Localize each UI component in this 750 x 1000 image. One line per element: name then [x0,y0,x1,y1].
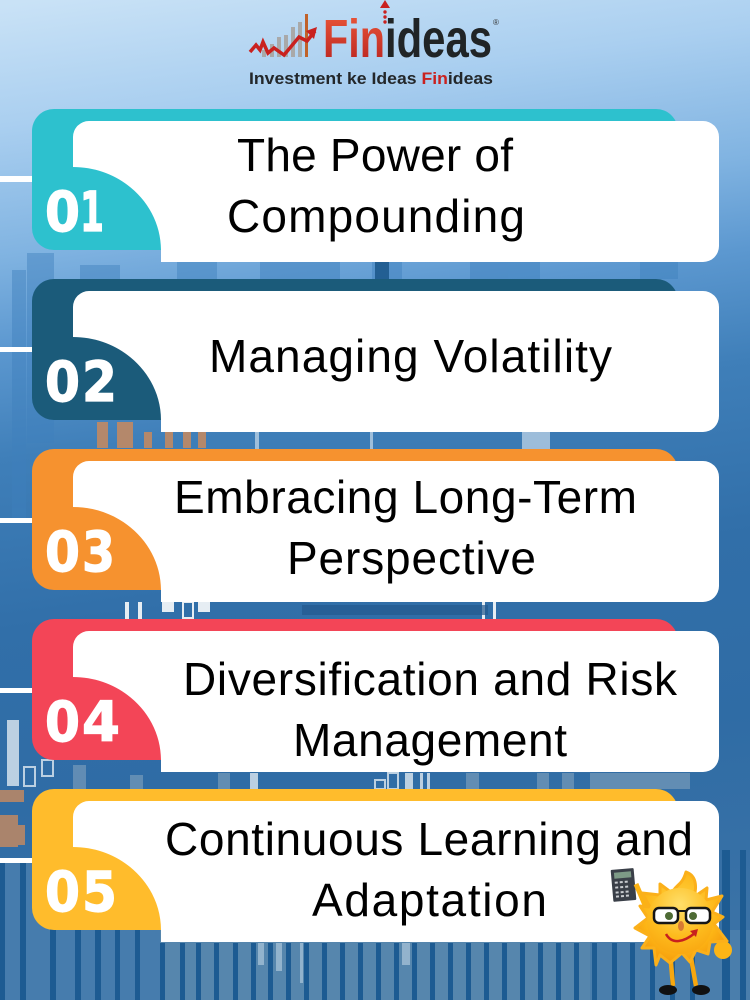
logo icon: rising chart with arrow [250,14,317,57]
number tab 03 [32,449,678,590]
heading 01: Compounding [227,190,525,242]
smile arrow [666,929,698,941]
number 01: 0 [45,180,80,244]
white card 01 [73,121,719,262]
panel: 02 Managing Volatility [32,279,719,432]
heading 01: The Power of [237,129,513,181]
logo wordmark: ideas [385,9,492,69]
number 03: 0 [45,520,80,584]
logo [249,0,499,88]
arms [636,884,722,945]
white card 02 [73,291,719,432]
registered mark: ® [493,18,499,27]
tagline: Investment ke Ideas Finideas [249,70,493,88]
white card 04 [73,631,719,772]
number 04: 4 [82,690,120,754]
heading 02: Managing Volatility [209,330,612,382]
number 04: 0 [45,690,80,754]
legs and shoes [659,952,710,995]
panel: 01 The Power of Compounding [32,109,719,262]
heading 04: Management [293,714,567,766]
number 05: 0 [45,860,80,924]
number 05: 5 [82,860,117,924]
number 02: 0 [45,350,80,414]
heading 03: Perspective [287,532,536,584]
logo wordmark: Fin [323,9,385,69]
number tab 02 [32,279,678,420]
sun face [647,888,713,954]
number tab 01 [32,109,678,250]
white card 03 [73,461,719,602]
heading 04: Diversification and Risk [183,653,678,705]
number 02: 2 [82,350,117,414]
panel: 03 Embracing Long-Term Perspective [32,449,719,602]
glasses [654,908,710,923]
heading 05: Adaptation [312,874,547,926]
white card 05 [73,801,719,942]
number tab 05 [32,789,678,930]
icon: sun mascot with calculator [611,868,732,995]
number 01: 1 [80,180,104,244]
number 03: 3 [82,520,115,584]
panel: 05 Continuous Learning and Adaptation [32,789,719,942]
calculator [611,868,636,902]
heading 05: Continuous Learning and [165,813,693,865]
number tab 04 [32,619,678,760]
nose [678,921,684,931]
panel: 04 Diversification and Risk Management [32,619,719,772]
logo arrow dots [380,0,390,24]
heading 03: Embracing Long-Term [174,471,637,523]
sun body rays [635,872,727,965]
